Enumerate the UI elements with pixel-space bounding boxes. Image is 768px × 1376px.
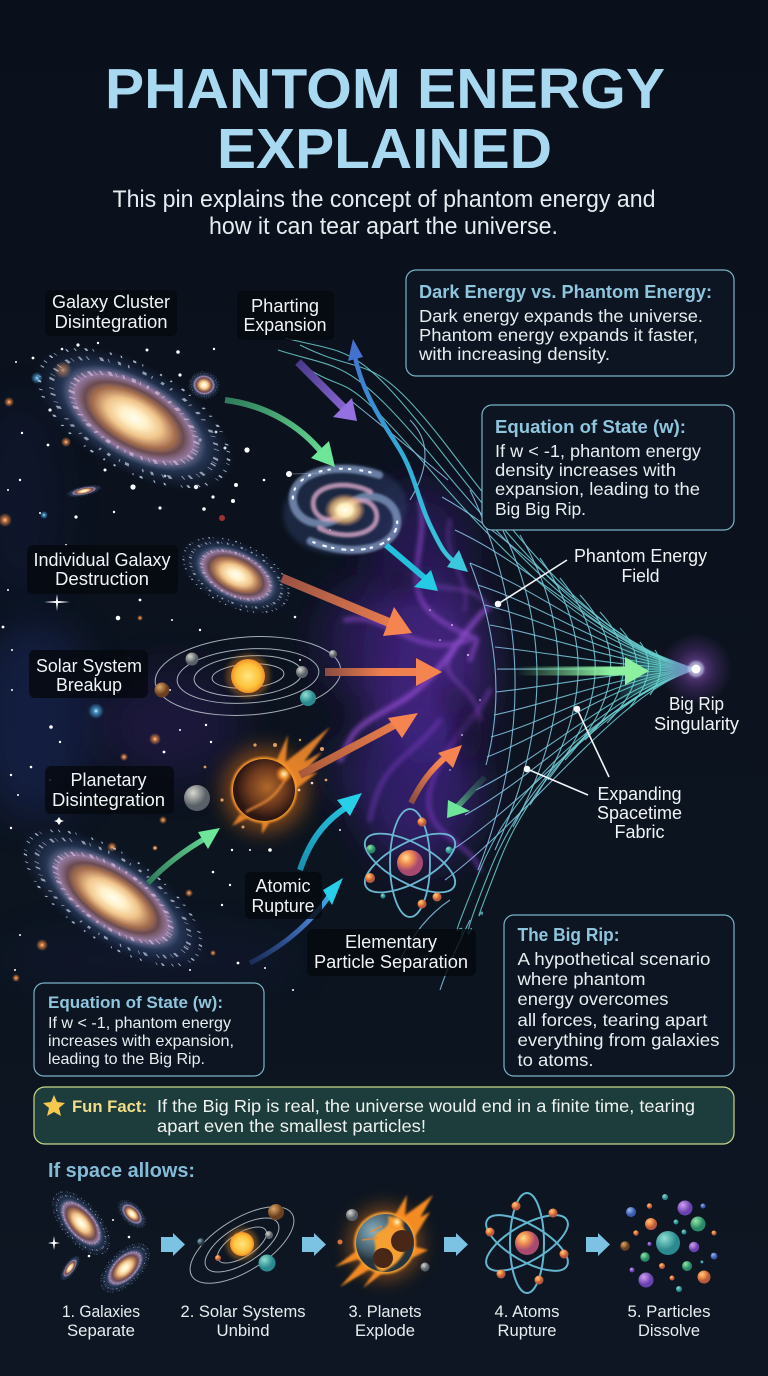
label with leader: phantom energy field	[495, 546, 707, 607]
panel: equation of state upper: If w < -1, phantom energy	[495, 441, 701, 461]
label: pharting expansion: Expansion	[244, 315, 326, 335]
step caption 1	[62, 1302, 140, 1340]
exploding planet	[184, 727, 330, 834]
step 4 icon: atom	[478, 1193, 576, 1293]
label with leaders: expanding spacetime fabric: Spacetime	[597, 803, 682, 823]
step 2 icon: solar system	[178, 1192, 306, 1298]
label: big rip singularity	[654, 694, 739, 734]
arrow: purple	[298, 362, 357, 421]
panel: dark energy vs phantom energy: Dark Energy vs. Phantom Energy:	[419, 281, 712, 302]
atom	[356, 809, 464, 917]
panel: the big rip: to atoms.	[518, 1050, 594, 1070]
step caption 4: 4. Atoms	[494, 1302, 560, 1321]
step caption 3: Explode	[355, 1321, 415, 1340]
title: EXPLAINED	[217, 117, 552, 180]
arrow: orange from individual galaxy	[282, 578, 412, 636]
arrow: cyan upward	[300, 793, 362, 870]
panel: the big rip: everything from galaxies	[518, 1030, 720, 1050]
galaxy: lower left	[0, 799, 228, 997]
heading: if space allows: If space allows:	[48, 1159, 195, 1182]
solar system	[153, 631, 343, 721]
step caption 5: Dissolve	[638, 1321, 700, 1340]
label: atomic rupture	[245, 872, 322, 919]
label: galaxy cluster disintegration: Galaxy Cluster	[52, 292, 170, 312]
panel: the big rip: where phantom	[516, 969, 646, 989]
step caption 5	[628, 1302, 710, 1340]
arrow: step 3 to 4	[444, 1233, 468, 1256]
arrow: cyan from spiral galaxy	[386, 545, 438, 591]
big rip singularity glow	[660, 633, 732, 705]
label: individual galaxy destruction: Individual Galaxy	[34, 550, 170, 570]
label: solar system breakup: Solar System	[36, 656, 142, 676]
label: planetary disintegration: Planetary	[70, 770, 146, 790]
step caption 5: 5. Particles	[628, 1302, 710, 1321]
subtitle: This pin explains the concept of phantom energy and	[112, 186, 656, 213]
label with leader: phantom energy field: Field	[622, 566, 660, 586]
step caption 4: Rupture	[498, 1321, 556, 1340]
step caption 3	[348, 1302, 422, 1340]
callout: fun fact: apart even the smallest particles!	[157, 1116, 426, 1136]
panel: equation of state upper	[482, 405, 734, 530]
label: galaxy cluster disintegration	[45, 290, 177, 336]
arrow: orange from planet	[300, 713, 418, 775]
galaxy: small companion	[186, 368, 222, 402]
label: elementary particle separation: Elementary	[345, 932, 437, 952]
step caption 2	[180, 1302, 306, 1340]
callout: fun fact: Fun Fact:	[72, 1097, 147, 1116]
step 5 icon: particles	[620, 1194, 717, 1292]
step caption 1: Separate	[67, 1321, 135, 1340]
arrow: orange from solar system	[325, 658, 442, 686]
arrow: step 1 to 2	[161, 1233, 185, 1256]
galaxy: large cluster galaxy	[10, 315, 258, 521]
label with leaders: expanding spacetime fabric: Expanding	[598, 784, 682, 804]
title: PHANTOM ENERGY	[105, 57, 665, 120]
panel: the big rip: A hypothetical scenario	[518, 949, 710, 969]
panel: the big rip	[504, 915, 734, 1076]
arrow: big green to singularity	[515, 657, 649, 685]
title	[105, 57, 665, 180]
panel: the big rip: all forces, tearing apart	[518, 1010, 708, 1030]
label: planetary disintegration: Disintegration	[52, 790, 165, 810]
label: atomic rupture: Atomic	[256, 876, 310, 896]
label: galaxy cluster disintegration: Disintegration	[54, 312, 168, 332]
panel: equation of state lower: increases with expansion,	[48, 1033, 234, 1050]
panel: equation of state upper: expansion, leading to the	[495, 479, 700, 499]
arrow: long blue-cyan	[348, 339, 468, 572]
step caption 1: 1. Galaxies	[62, 1302, 140, 1321]
panel: equation of state upper: Equation of State (w):	[495, 416, 686, 437]
label: elementary particle separation: Particle Separation	[314, 952, 468, 972]
purple phantom energy nebula	[320, 485, 490, 870]
starfield and left nebula haze	[0, 342, 341, 991]
galaxy: spiral	[277, 458, 413, 562]
panel: the big rip: energy overcomes	[518, 989, 669, 1009]
label: solar system breakup: Breakup	[56, 675, 122, 695]
step caption 4	[494, 1302, 560, 1340]
label: pharting expansion	[237, 291, 334, 340]
galaxy: edge-on distant	[65, 482, 103, 500]
label: individual galaxy destruction	[27, 545, 178, 594]
step caption 3: 3. Planets	[348, 1302, 422, 1321]
label: individual galaxy destruction: Destruction	[55, 569, 149, 589]
panel: dark energy vs phantom energy: Dark energy expands the universe.	[419, 306, 703, 326]
label: big rip singularity: Singularity	[654, 714, 739, 734]
label: pharting expansion: Pharting	[251, 296, 319, 316]
callout: fun fact	[34, 1087, 734, 1144]
step 3 icon: exploding planet	[335, 1195, 433, 1288]
subtitle	[112, 186, 656, 240]
label: solar system breakup	[29, 650, 148, 698]
panel: equation of state upper: density increases with	[495, 460, 676, 480]
panel: equation of state lower: If w < -1, phantom energy	[48, 1015, 231, 1032]
panel: equation of state lower: leading to the Big Rip.	[48, 1051, 205, 1068]
arrow: orange from atom	[411, 745, 462, 803]
arrow: step 2 to 3	[302, 1233, 326, 1256]
label with leader: phantom energy field: Phantom Energy	[574, 546, 707, 566]
label: atomic rupture: Rupture	[252, 896, 314, 916]
label: big rip singularity: Big Rip	[669, 694, 724, 714]
expanding spacetime fabric mesh	[278, 338, 696, 990]
arrow: green toward atom	[447, 777, 485, 818]
arrow: green lower-left	[148, 828, 220, 883]
step 1 icon: galaxies	[40, 1180, 160, 1303]
panel: dark energy vs phantom energy: with increasing density.	[418, 344, 610, 364]
panel: equation of state lower: Equation of State (w):	[48, 993, 223, 1012]
panel: the big rip: The Big Rip:	[518, 924, 620, 945]
arrow: step 4 to 5	[586, 1233, 610, 1256]
panel: equation of state lower	[34, 983, 264, 1076]
label with leaders: expanding spacetime fabric	[524, 706, 682, 842]
step caption 2: 2. Solar Systems	[180, 1302, 306, 1321]
galaxy: individual galaxy	[168, 519, 304, 631]
subtitle: how it can tear apart the universe.	[209, 213, 558, 240]
arrow: green from cluster	[225, 400, 335, 467]
panel: dark energy vs phantom energy: Phantom energy expands it faster,	[419, 325, 698, 345]
step caption 2: Unbind	[216, 1321, 270, 1340]
label with leaders: expanding spacetime fabric: Fabric	[614, 822, 664, 842]
panel: equation of state upper: Big Big Rip.	[495, 499, 586, 519]
label: planetary disintegration	[45, 766, 174, 814]
callout: fun fact: If the Big Rip is real, the universe would end in a finite time, tearing	[157, 1096, 695, 1116]
panel: dark energy vs phantom energy	[406, 270, 734, 376]
arrow: blue lower	[250, 878, 343, 963]
label: elementary particle separation	[307, 929, 476, 976]
